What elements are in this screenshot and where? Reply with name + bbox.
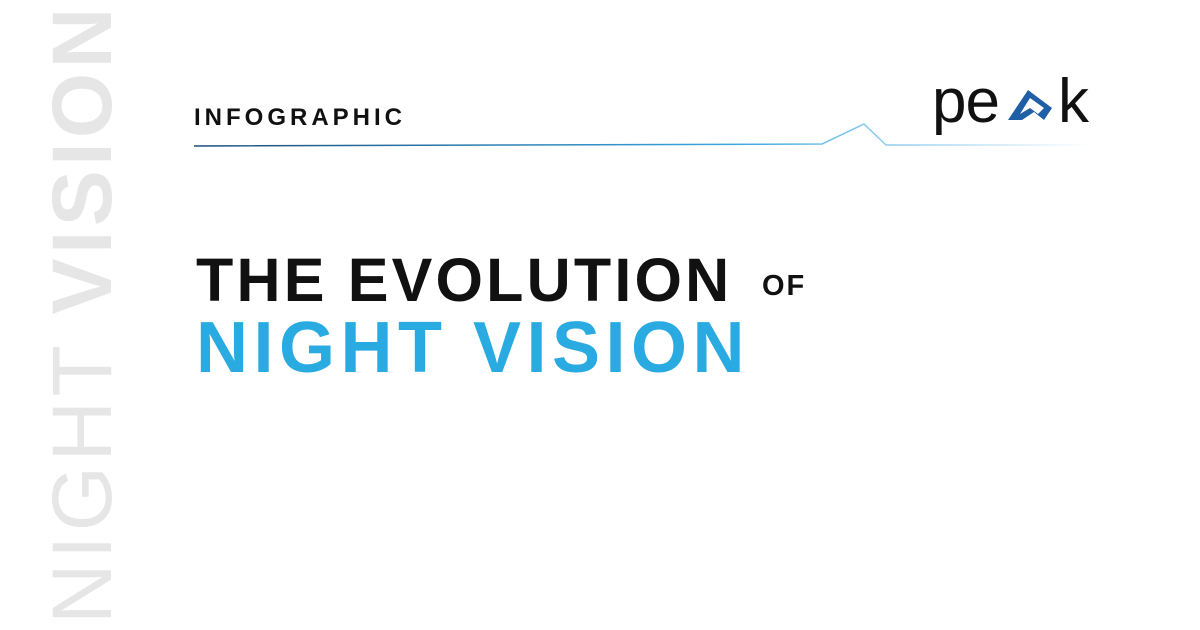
icon: mountain [1008,90,1052,120]
title [196,246,806,388]
title: NIGHT VISION [196,308,750,388]
logo: peak [932,67,1089,136]
logo: peak: pe [932,67,999,136]
title: THE EVOLUTION [196,246,732,314]
title: OF [762,270,806,302]
header line with peak [194,123,1076,147]
label: INFOGRAPHIC: INFOGRAPHIC [194,104,406,131]
logo: peak: k [1058,67,1089,136]
vertical watermark: NIGHT VISION: NIGHT VISION [35,3,129,624]
